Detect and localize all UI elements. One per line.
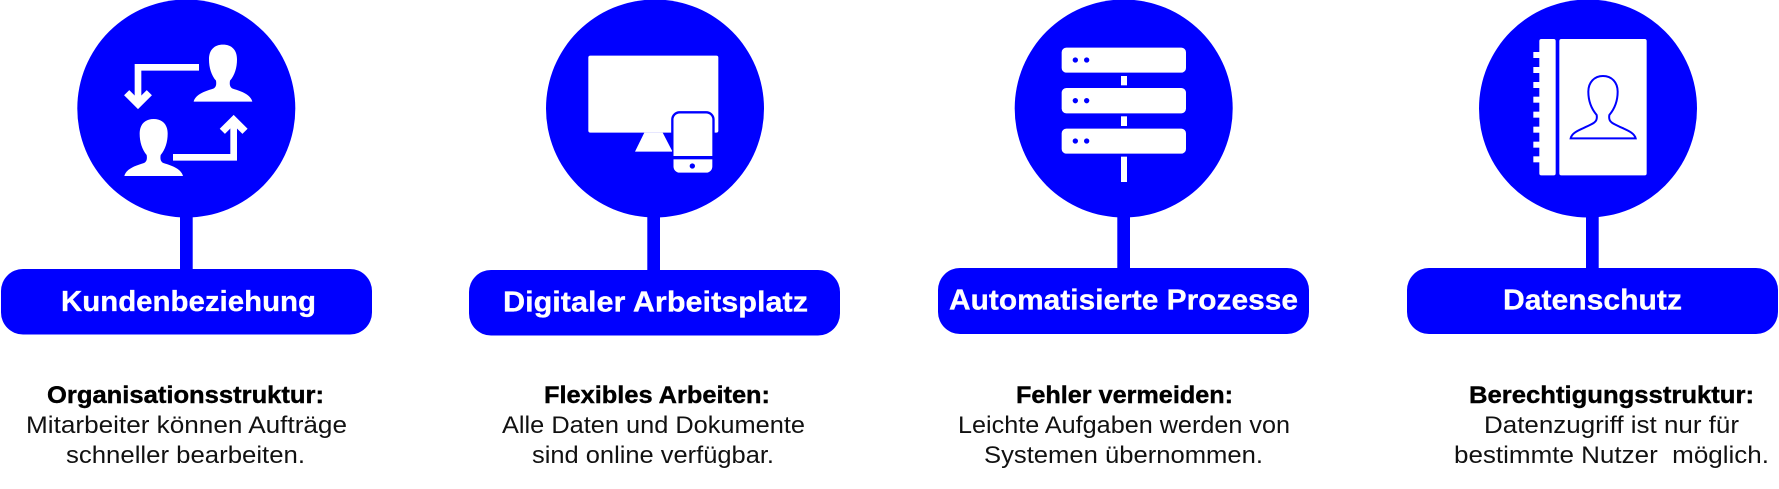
icon: two people exchanging arrows	[124, 45, 252, 176]
description text: Berechtigungsstruktur:	[1469, 382, 1754, 409]
connector stem	[647, 212, 660, 272]
label pill	[469, 270, 840, 336]
description text	[502, 382, 805, 469]
panel: Automatisierte Prozesse	[938, 0, 1309, 469]
description text: Mitarbeiter können Aufträge	[26, 412, 347, 439]
description text: Alle Daten und Dokumente	[502, 412, 805, 439]
description text	[958, 382, 1290, 469]
description text: Flexibles Arbeiten:	[544, 382, 770, 409]
description text	[1454, 382, 1769, 469]
description text: sind online verfügbar.	[532, 442, 774, 469]
circle badge	[77, 0, 295, 218]
circle badge	[546, 0, 764, 218]
description text: Organisationsstruktur:	[47, 382, 324, 409]
connector stem	[1117, 212, 1130, 272]
description text: bestimmte Nutzer möglich.	[1454, 442, 1769, 469]
panel: Digitaler Arbeitsplatz	[469, 0, 840, 469]
circle badge	[1479, 0, 1697, 218]
description text: schneller bearbeiten.	[66, 442, 305, 469]
description text: Systemen übernommen.	[984, 442, 1263, 469]
description text: Fehler vermeiden:	[1016, 382, 1233, 409]
description text: Leichte Aufgaben werden von	[958, 412, 1290, 439]
label pill	[938, 268, 1309, 334]
connector stem	[1586, 212, 1599, 272]
icon: server stack	[1062, 48, 1186, 182]
pill label: Digitaler Arbeitsplatz	[503, 286, 808, 318]
pill label: Datenschutz	[1503, 284, 1682, 316]
label pill	[1, 269, 372, 334]
pill label: Kundenbeziehung	[61, 286, 316, 318]
icon: address book	[1533, 39, 1647, 175]
panel: Kundenbeziehung	[1, 0, 372, 469]
connector stem	[180, 212, 193, 272]
pill label: Automatisierte Prozesse	[949, 284, 1298, 316]
label pill	[1407, 268, 1778, 334]
description text	[26, 382, 347, 469]
description text: Datenzugriff ist nur für	[1484, 412, 1739, 439]
circle badge	[1015, 0, 1233, 218]
icon: monitor and smartphone	[588, 56, 718, 174]
panel: Datenschutz	[1407, 0, 1778, 469]
